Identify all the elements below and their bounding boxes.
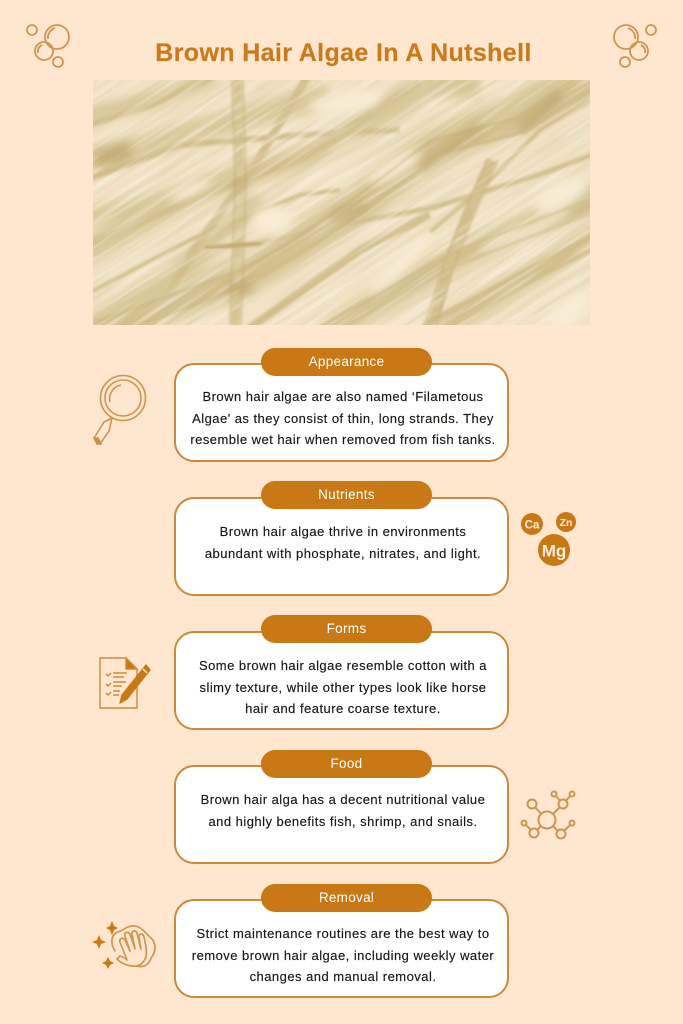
fibrous noise texture (93, 80, 590, 325)
heading: forms (261, 615, 432, 643)
text: removal (192, 926, 494, 984)
panel: forms (174, 615, 509, 730)
text: appearance: Algae' as they consist of thin, long strands. They (192, 411, 494, 426)
title: Brown Hair Algae In A Nutshell (155, 39, 532, 67)
icon: bubbles right (613, 24, 657, 68)
icon: mineral circles (521, 512, 576, 566)
text: nutrients: abundant with phosphate, nitrates, and light. (205, 546, 481, 561)
heading: removal: Removal (319, 890, 374, 905)
icon: cleaning hand with sparkles (92, 921, 156, 969)
text: removal: Strict maintenance routines are the best way to (196, 926, 490, 941)
panel: appearance (174, 348, 509, 462)
text: appearance (190, 389, 496, 447)
text: appearance: Brown hair algae are also named ‘Filametous (202, 389, 484, 404)
text: appearance: resemble wet hair when removed from fish tanks. (190, 432, 496, 447)
text: forms (199, 658, 487, 716)
text: food: Brown hair alga has a decent nutritional value (201, 792, 485, 807)
text: food (201, 792, 485, 829)
panel: nutrients (174, 481, 509, 596)
panel: food (174, 750, 509, 864)
heading: nutrients: Nutrients (318, 487, 375, 502)
icon: mineral circles: Mg (542, 542, 566, 560)
heading: appearance (261, 348, 432, 376)
text: nutrients: Brown hair algae thrive in environments (220, 524, 466, 539)
heading: nutrients (261, 481, 432, 509)
heading: forms: Forms (327, 621, 366, 636)
text: forms: slimy texture, while other types look like horse (199, 680, 486, 695)
text: nutrients (205, 524, 481, 561)
icon: mineral circles: Zn (560, 517, 572, 529)
heading: food (261, 750, 432, 778)
text: forms: hair and feature coarse texture. (245, 701, 441, 716)
icon: checklist and pencil (99, 656, 151, 709)
text: removal: remove brown hair algae, including weekly water (192, 948, 494, 963)
heading: food: Food (330, 756, 362, 771)
icon: mineral circles: Ca (525, 520, 540, 532)
icon: molecule (520, 790, 576, 840)
text: removal: changes and manual removal. (250, 969, 436, 984)
icon: magnifying glass (92, 374, 146, 445)
panel: removal (174, 884, 509, 998)
heading: appearance: Appearance (309, 354, 384, 369)
icon: bubbles left (26, 24, 70, 68)
heading: removal (261, 884, 432, 912)
text: food: and highly benefits fish, shrimp, and snails. (208, 814, 478, 829)
photo: brown hair algae filaments (93, 80, 590, 325)
text: forms: Some brown hair algae resemble cotton with a (199, 658, 487, 673)
